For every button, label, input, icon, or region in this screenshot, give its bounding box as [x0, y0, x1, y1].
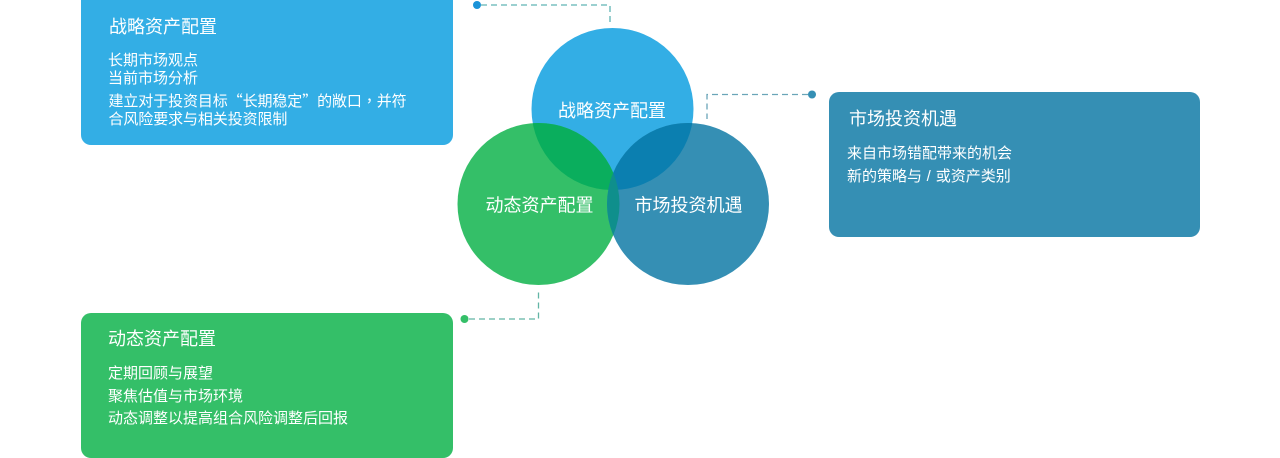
overlap: blue and teal — [608, 123, 692, 190]
text: dynamic points: 聚焦估值与市场环境 — [108, 388, 243, 404]
heading: strategic: 战略资产配置 — [109, 17, 217, 37]
text: strategic exposure: 合风险要求与相关投资限制 — [108, 108, 287, 129]
connector: strategic panel to circle — [473, 1, 610, 25]
text: dynamic points — [108, 365, 348, 427]
label: strategic circle: 战略资产配置 — [558, 101, 666, 121]
text: strategic points: 长期市场观点 — [108, 52, 198, 69]
text: dynamic points: 动态调整以提高组合风险调整后回报 — [108, 410, 348, 427]
text: strategic points — [108, 52, 198, 87]
overlap: green and teal — [607, 173, 620, 236]
panel: strategic asset allocation — [81, 0, 453, 145]
circle: dynamic allocation — [458, 123, 620, 285]
heading: market: 市场投资机遇 — [849, 108, 957, 128]
circle: strategic allocation — [532, 28, 694, 190]
panel: dynamic asset allocation — [81, 313, 453, 458]
text: market points: 新的策略与 / 或资产类别 — [847, 168, 1011, 185]
circle: market opportunity — [607, 123, 769, 285]
text: market points — [847, 145, 1012, 185]
text: strategic exposure — [108, 90, 407, 129]
diagram: three overlapping circles with connectors — [458, 1, 816, 323]
heading: dynamic: 动态资产配置 — [108, 329, 216, 349]
text: market points: 来自市场错配带来的机会 — [847, 145, 1012, 162]
label: dynamic circle: 动态资产配置 — [486, 196, 594, 216]
text: dynamic points: 定期回顾与展望 — [108, 365, 213, 382]
label: market circle: 市场投资机遇 — [634, 196, 742, 216]
connector: market panel to circle — [707, 90, 816, 119]
text: strategic exposure: 建立对于投资目标“长期稳定”的敞口，并符 — [108, 90, 407, 111]
overlap: blue and green — [532, 123, 614, 190]
connector: dynamic panel to circle — [460, 290, 538, 323]
text: strategic points: 当前市场分析 — [108, 70, 198, 87]
panel: market investment opportunity — [829, 92, 1200, 236]
